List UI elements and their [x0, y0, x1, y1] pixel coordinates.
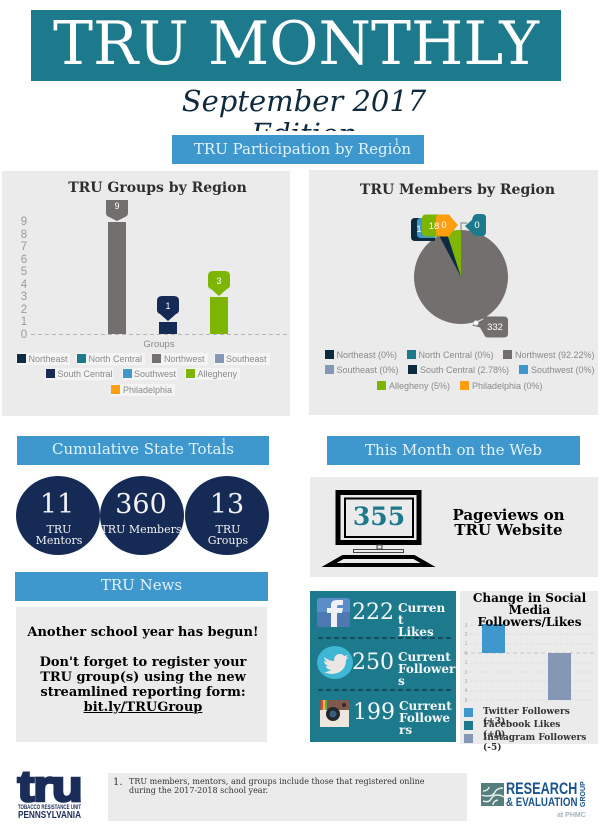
stat: 199 current followers: Followe — [399, 711, 450, 725]
pie chart: members by region: 0 — [474, 220, 480, 231]
bar chart: groups by region: Northeast — [28, 354, 68, 364]
stat: TRU mentors — [16, 476, 100, 555]
pie chart: members by region: 1 — [416, 224, 422, 235]
stat: 199 current followers: 199 — [353, 700, 395, 725]
stat: pageviews count: 355 — [353, 502, 405, 531]
bar chart: groups by region: 9 — [114, 201, 120, 211]
stat: TRU groups — [185, 476, 269, 555]
pie chart: members by region: 0 — [441, 220, 447, 231]
logo: Research & Evaluation Group — [481, 780, 587, 819]
title banner: TRU MONTHLY — [53, 9, 539, 79]
logo: TRU: TOBACCO RESISTANCE UNIT — [18, 804, 81, 811]
stat: 199 current followers — [353, 699, 452, 737]
heading: groups chart title: TRU Groups by Region — [68, 180, 247, 196]
heading: TRU participation by region: 1 — [394, 138, 400, 148]
bar chart: groups by region: Southeast — [226, 354, 267, 364]
heading: change in social media followers: Followers/Likes — [477, 615, 582, 629]
footnote text — [129, 777, 424, 795]
heading: cumulative state totals — [17, 436, 269, 465]
panel: TRU members by region — [309, 170, 598, 415]
bar chart: groups by region: North Central — [88, 354, 142, 364]
stat: 199 current followers: Current — [399, 699, 452, 713]
icon: computer monitor — [322, 490, 436, 567]
stat: 222 current likes: 222 — [352, 600, 394, 625]
stat: 222 current likes — [352, 600, 445, 639]
logo: TRU: tru — [17, 762, 82, 811]
stat: TRU members — [100, 476, 184, 555]
panel: TRU news text: TRU group(s) using the new — [40, 670, 246, 685]
stat: 222 current likes: t — [398, 613, 404, 627]
stat: 222 current likes: Curren — [398, 601, 445, 615]
bar chart: change in followers: 1 — [465, 641, 468, 647]
stat: 250 current followers: Current — [398, 650, 451, 664]
bar chart: groups by region: 7 — [21, 241, 27, 253]
heading: change in social media followers — [473, 591, 586, 629]
bar chart: groups by region: Northwest — [164, 354, 205, 364]
bar chart: groups by region: 3 — [216, 276, 222, 286]
bar chart: groups by region: 4 — [21, 279, 28, 291]
bar chart: groups by region: 2 — [21, 304, 27, 316]
legend: social change: Twitter Followers — [483, 707, 570, 717]
bar chart: change in followers: 4 — [465, 688, 468, 694]
text: pageviews label: TRU Website — [454, 521, 563, 539]
logo: TRU: PENNSYLVANIA — [18, 810, 81, 821]
stat: 250 current followers: Follower — [398, 662, 455, 676]
logo: Research & Evaluation Group: at PHMC — [557, 812, 586, 819]
bar chart: groups by region — [16, 200, 287, 396]
pie chart: members by region: North Central (0%) — [418, 350, 494, 360]
stat: TRU members: 360 — [115, 489, 167, 520]
pie chart: members by region: Southwest (0%) — [531, 365, 595, 375]
panel: social media counts — [310, 591, 456, 742]
heading: this month on the web — [327, 436, 580, 465]
bar chart: groups by region: 1 — [165, 301, 171, 311]
bar chart: groups by region: Southwest — [134, 369, 177, 379]
heading: TRU news: TRU News — [101, 576, 182, 594]
footnote text: TRU members, mentors, and groups include those that registered online — [129, 777, 424, 786]
heading: TRU participation by region: TRU Participation by Region — [194, 140, 411, 158]
bar chart: groups by region: 3 — [21, 291, 27, 303]
bar chart: groups by region: South Central — [58, 369, 113, 379]
stat: TRU mentors: 11 — [40, 489, 74, 520]
pie chart: members by region: Allegheny (5%) — [389, 381, 450, 391]
heading: cumulative state totals: Cumulative State Totals — [52, 440, 234, 458]
stat: 199 current followers: rs — [399, 723, 412, 737]
logo: Research & Evaluation Group: & EVALUATION — [506, 795, 577, 809]
icon: instagram — [320, 700, 349, 727]
pie chart: members by region: Southeast (0%) — [336, 365, 399, 375]
heading: this month on the web: This Month on the Web — [365, 441, 542, 459]
stat: TRU groups: TRU — [216, 523, 240, 536]
legend: social change — [483, 707, 586, 752]
icon: facebook — [317, 598, 350, 627]
stat: TRU mentors: TRU — [47, 523, 71, 536]
heading: TRU participation by region — [172, 135, 424, 164]
bar chart: change in followers: 5 — [465, 698, 468, 704]
panel: TRU news text: Don't forget to register your — [40, 655, 246, 670]
panel: TRU groups by region — [2, 171, 290, 416]
logo: Research & Evaluation Group: GROUP — [580, 781, 587, 807]
heading: cumulative state totals: 1 — [221, 438, 227, 448]
panel: footnote — [108, 773, 467, 821]
pie chart: members by region: 18 — [429, 221, 439, 232]
stat: TRU mentors: Mentors — [36, 534, 82, 547]
stat: 250 current followers — [352, 650, 456, 688]
panel: TRU news text — [16, 607, 267, 742]
heading: members chart title: TRU Members by Region — [360, 182, 555, 198]
stat: 222 current likes: Likes — [398, 625, 434, 639]
panel: change in social media — [460, 591, 598, 744]
text: pageviews label: Pageviews on — [452, 506, 565, 524]
panel: pageviews — [310, 477, 598, 577]
pie chart: members by region: Northwest (92.22%) — [515, 350, 595, 360]
stat: TRU groups: 13 — [210, 489, 244, 520]
stat: TRU members: TRU Members — [100, 523, 182, 536]
bar chart: groups by region: 9 — [21, 216, 27, 228]
bar chart: groups by region: 1 — [21, 316, 27, 328]
panel: TRU news text: bit.ly/TRUGroup — [84, 700, 202, 715]
bar chart: change in followers: 3 — [465, 623, 468, 629]
bar chart: change in followers: 0 — [465, 651, 468, 657]
icon: twitter — [317, 646, 353, 679]
bar chart: groups by region: 0 — [21, 329, 27, 341]
panel: TRU news text: Another school year has begun! — [27, 625, 259, 640]
bar chart: groups by region: 6 — [21, 254, 27, 266]
pie chart: members by region — [325, 214, 595, 391]
pie chart: members by region: Northeast (0%) — [336, 350, 397, 360]
bar chart: change in followers: 2 — [465, 670, 468, 676]
legend: social change: Facebook Likes — [483, 720, 560, 730]
text: pageviews label — [452, 506, 565, 539]
pie chart: members by region: Philadelphia (0%) — [472, 381, 543, 391]
bar chart: change in followers: 2 — [465, 632, 468, 638]
row: facebook — [317, 598, 445, 639]
logo: Research & Evaluation Group: RESEARCH — [506, 780, 577, 798]
row: instagram — [320, 699, 452, 737]
heading: change in social media followers: Media — [509, 603, 550, 617]
legend: social change: (+0) — [483, 730, 505, 740]
subtitle: edition: September 2017 — [182, 85, 426, 118]
heading: change in social media followers: Change in Social — [473, 591, 586, 605]
bar chart: change in followers: 3 — [465, 679, 468, 685]
stat: 250 current followers: s — [398, 674, 405, 688]
footnote text: during the 2017-2018 school year. — [129, 786, 268, 794]
pie chart: members by region: South Central (2.78%) — [420, 365, 509, 375]
legend: social change: Instagram Followers — [483, 733, 586, 743]
row: twitter — [317, 646, 456, 688]
legend: social change: (-5) — [483, 742, 502, 752]
pie chart: members by region: 332 — [487, 322, 503, 333]
footnote number: 1. — [113, 777, 123, 788]
heading: TRU news — [15, 572, 268, 601]
stat: TRU groups: Groups — [208, 534, 248, 547]
bar chart: groups by region: Philadelphia — [123, 385, 172, 395]
bar chart: groups by region: 5 — [21, 266, 27, 278]
bar chart: groups by region: Groups — [143, 339, 175, 350]
stat: 250 current followers: 250 — [352, 650, 394, 675]
panel: TRU news text: streamlined reporting form: — [40, 685, 246, 700]
bar chart: change in followers: 1 — [465, 660, 468, 666]
bar chart: groups by region: Allegheny — [198, 369, 238, 379]
legend: social change: (+3) — [483, 716, 505, 726]
bar chart: groups by region: 8 — [21, 229, 27, 241]
